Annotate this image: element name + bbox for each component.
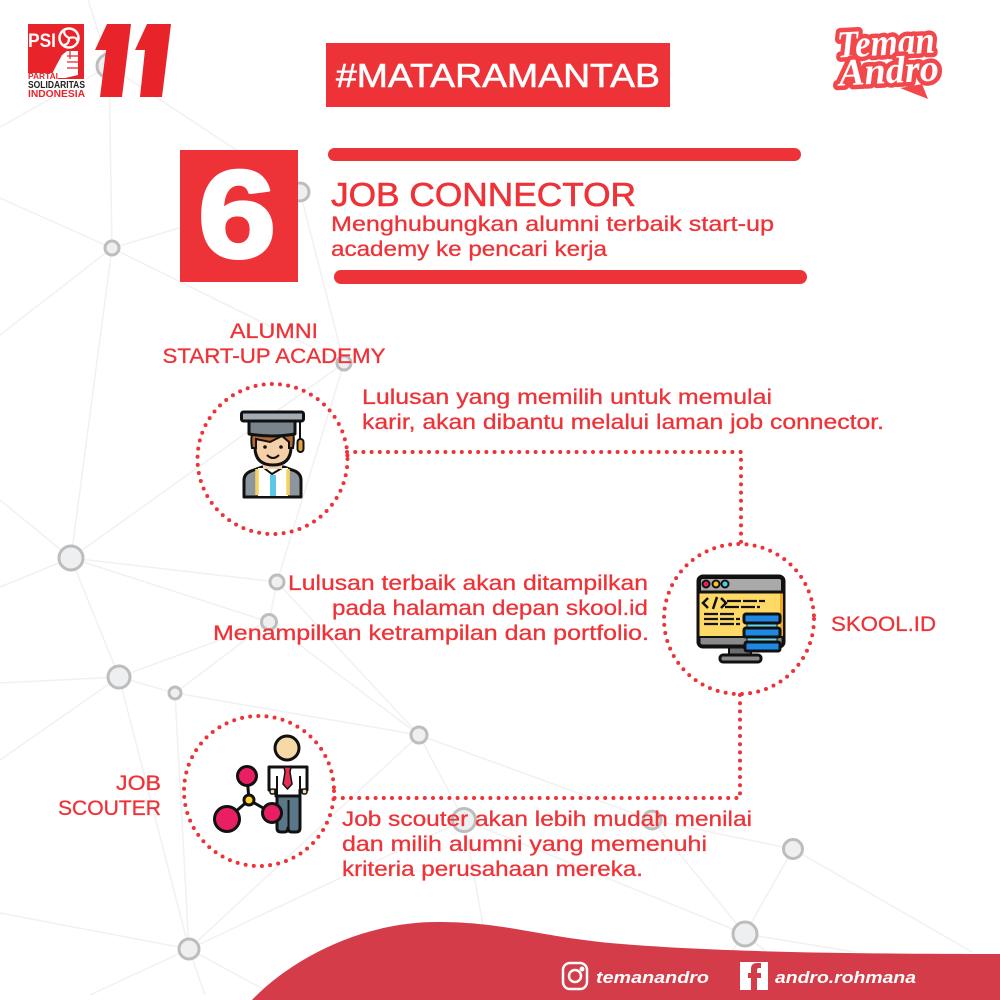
- text: lulusan terbaik: pada halaman depan skool.id: [332, 597, 648, 620]
- label: alumni: START-UP ACADEMY: [162, 344, 386, 368]
- logo: PSI: PSI: [28, 31, 56, 52]
- label: alumni: [162, 319, 386, 368]
- dotted connector: [332, 452, 741, 798]
- icon: graduate: [242, 412, 304, 497]
- subtitle: academy ke pencari kerja: [331, 238, 607, 261]
- logo: PSI: INDONESIA: [28, 89, 85, 100]
- text: job scouter: kriteria perusahaan mereka.: [342, 858, 643, 881]
- logo: PSI: PARTAI: [28, 72, 58, 81]
- label: skool.id: SKOOL.ID: [831, 612, 936, 636]
- bottom bar: [334, 270, 807, 284]
- text: lulusan: Lulusan yang memilih untuk memulai: [362, 386, 772, 409]
- label: job scouter: [58, 771, 161, 820]
- text: lulusan terbaik: [213, 572, 649, 645]
- footer wave: [252, 922, 1000, 1000]
- icon: code window: [698, 576, 784, 662]
- hashtag banner: #MATARAMANTAB: [336, 58, 660, 95]
- logo: PSI: SOLIDARITAS: [28, 80, 85, 91]
- number badge 6: [180, 146, 298, 284]
- subtitle: Menghubungkan alumni terbaik start-up: [331, 213, 774, 236]
- text: lulusan: karir, akan dibantu melalui laman job connector.: [362, 411, 884, 434]
- logo: Teman Andro: [836, 19, 940, 99]
- icon: instagram: [563, 963, 587, 989]
- label: alumni: ALUMNI: [230, 319, 318, 343]
- text: job scouter: [342, 808, 752, 881]
- label: job scouter: JOB: [116, 771, 161, 795]
- top bar: [328, 148, 801, 161]
- circle: skool: [664, 544, 814, 694]
- text: lulusan terbaik: Menampilkan ketrampilan dan portfolio.: [213, 622, 649, 645]
- hashtag banner: [326, 43, 670, 107]
- logo: Teman Andro: Andro: [836, 47, 940, 95]
- text: lulusan terbaik: Lulusan terbaik akan ditampilkan: [288, 572, 648, 595]
- text: job scouter: dan milih alumni yang memenuhi: [342, 833, 707, 856]
- label: job scouter: SCOUTER: [58, 796, 161, 820]
- icon: facebook: [740, 962, 768, 990]
- logo: PSI: [28, 24, 85, 100]
- social: facebook handle: andro.rohmana: [775, 968, 916, 987]
- circle: scouter: [184, 716, 334, 866]
- social: instagram handle: temanandro: [596, 968, 709, 987]
- circle: alumni: [198, 384, 348, 534]
- number badge 6: 6: [198, 146, 276, 284]
- logo: Teman Andro: Teman: [836, 19, 936, 67]
- heading: JOB CONNECTOR: [331, 177, 636, 214]
- subtitle: [331, 213, 774, 261]
- text: job scouter: Job scouter akan lebih mudah menilai: [342, 808, 752, 831]
- text: lulusan: [362, 386, 884, 434]
- logo: number 11: [95, 24, 171, 97]
- icon: scouter person: [214, 736, 307, 832]
